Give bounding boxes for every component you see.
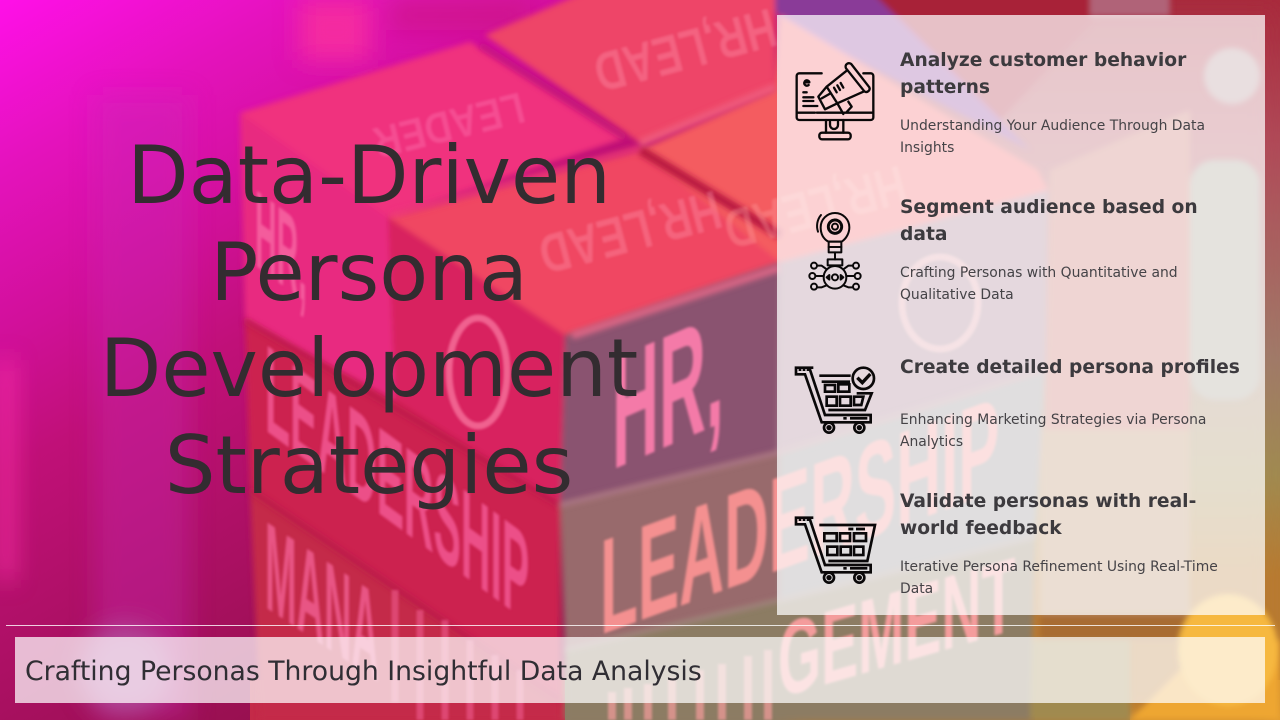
text: analyze description: Understanding Your Audience Through Data Insights [900,118,1205,156]
icon: shopping cart with check [794,366,876,434]
background photo: letter cubes with magenta overlay: HR,LEAD [717,153,913,260]
panel: persona steps [777,15,1265,615]
footer banner [15,637,1265,703]
background photo: letter cubes with magenta overlay: HR,LEAD [532,178,728,285]
title: Data-Driven [127,129,611,222]
left faces [240,113,395,400]
yellow figure [1130,640,1280,720]
footer banner: Crafting Personas Through Insightful Data Analysis [25,656,702,687]
icon: lightbulb with gear network [808,212,862,291]
icon: monitor with megaphone [796,62,874,140]
printed words on cubes: LEADERSHIP [600,368,1000,664]
printed words on cubes [255,167,1015,720]
heading: analyze: Analyze customer behavior patterns [900,50,1186,98]
heading: validate: Validate personas with real-world feedback [900,491,1196,539]
printed words on cubes: HR, [255,167,307,327]
distant light figure [1204,48,1260,104]
printed words on cubes: GEMENT [778,534,1015,720]
title: Persona [210,226,528,318]
printed words on cubes: MANA [265,494,379,709]
text: validate description: Iterative Persona Refinement Using Real-Time Data [900,559,1218,597]
title: Strategies [165,418,573,512]
front grey faces [560,190,1048,505]
printed words on cubes: LEADERSHIP [265,319,529,651]
title [100,129,638,512]
background photo: letter cubes with magenta overlay: LEADER [368,83,530,168]
icon: shopping cart [794,516,877,584]
text: segment description: Crafting Personas with Quantitative and Qualitative Data [900,265,1178,303]
heading: create: Create detailed persona profiles [900,357,1240,378]
title: Development [100,322,638,415]
top faces [240,42,625,217]
text: create description: Enhancing Marketing Strategies via Persona Analytics [900,412,1206,450]
cube edge highlights [245,45,1045,700]
heading: segment: Segment audience based on data [900,197,1198,245]
printed words on cubes: HR, [612,278,724,505]
letter fragments running off the lower edge [395,590,768,720]
